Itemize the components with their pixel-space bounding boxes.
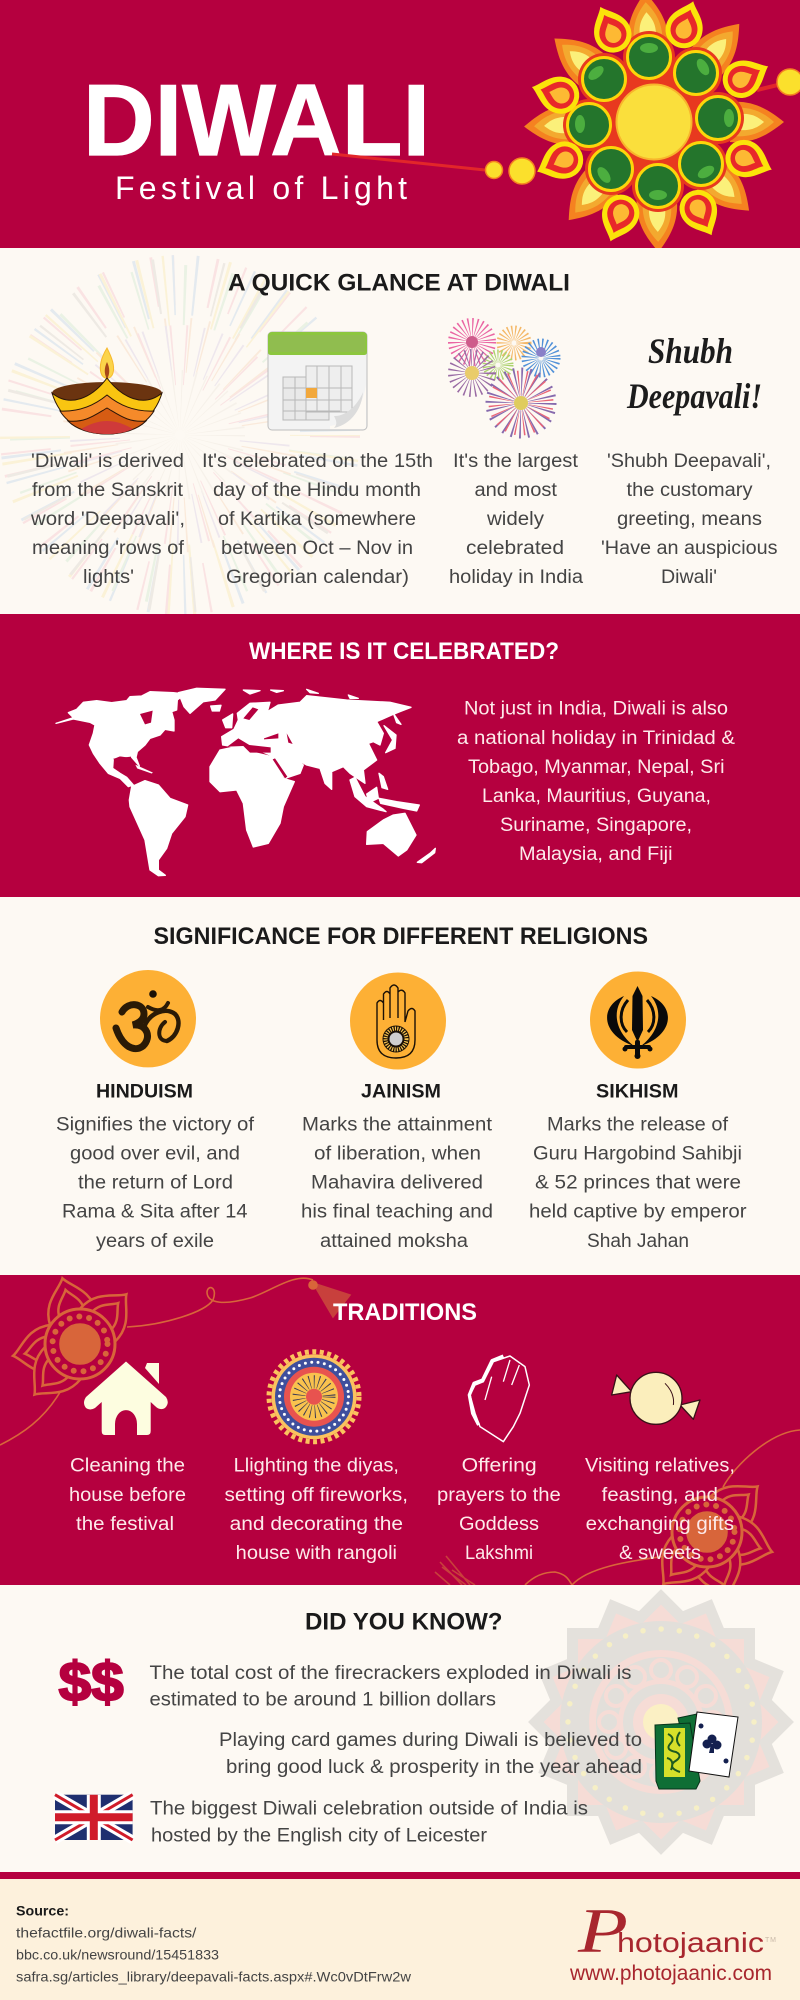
sources: bbc.co.uk/newsround/15451833 (16, 1946, 219, 1962)
text: largest holiday: celebrated (466, 538, 564, 559)
text: date: between Oct – Nov in (221, 538, 413, 559)
religion: Sikhism: & 52 princes that were (535, 1173, 741, 1194)
text: prayers: Lakshmi (465, 1543, 533, 1564)
text: largest holiday: and most (474, 480, 558, 501)
fact: firecrackers: The total cost of the firecrackers exploded in Diwali is (150, 1663, 632, 1684)
text: countries: Not just in India, Diwali is also (464, 699, 728, 720)
religion: Hinduism (56, 1081, 255, 1252)
logo: Photojaanic: P (577, 1895, 628, 1966)
sources: Source: (16, 1903, 69, 1919)
sources: safra.sg/articles_library/deepavali-facts.aspx#.Wc0vDtFrw2w (16, 1968, 412, 1984)
text: date (202, 451, 433, 588)
religion: Hinduism: years of exile (96, 1231, 214, 1252)
text: greeting meaning: greeting, means (617, 509, 762, 530)
heading: SIGNIFICANCE FOR DIFFERENT RELIGIONS (154, 923, 648, 950)
fact: Leicester: hosted by the English city of Leicester (151, 1826, 488, 1847)
text: cleaning (69, 1456, 186, 1535)
world map (56, 688, 435, 876)
religion: Sikhism: SIKHISM (596, 1081, 678, 1103)
panel: footer (0, 1879, 800, 2000)
fact: card games (219, 1730, 642, 1778)
text: lighting: setting off fireworks, (224, 1485, 408, 1506)
icon: dollar signs: $$ (59, 1650, 124, 1713)
divider band (0, 1872, 800, 1879)
religion: Jainism: of liberation, when (314, 1144, 481, 1165)
religion: Sikhism (529, 1081, 747, 1252)
religion: Sikhism: held captive by emperor (529, 1202, 747, 1223)
text: Deepavali origin: meaning 'rows of (32, 538, 185, 559)
text: date: Gregorian calendar) (226, 567, 409, 588)
panel: quick glance (0, 248, 800, 614)
text: greeting meaning (601, 451, 778, 588)
religion: Jainism: his final teaching and (301, 1202, 493, 1223)
religion: Jainism: Marks the attainment (302, 1114, 493, 1136)
text: visiting (585, 1456, 735, 1564)
icon: khanda (590, 972, 686, 1068)
text: Deepavali origin: word 'Deepavali', (30, 509, 185, 530)
religion: Jainism: attained moksha (320, 1231, 468, 1252)
icon: praying hand (469, 1356, 529, 1442)
text: lighting: house with rangoli (236, 1543, 397, 1564)
text: countries: a national holiday in Trinidad & (457, 728, 735, 749)
logo: Photojaanic: TM (765, 1937, 776, 1944)
religion: Sikhism: Guru Hargobind Sahibji (533, 1144, 742, 1165)
text: lighting: Llighting the diyas, (234, 1456, 399, 1477)
icon: playing cards (655, 1712, 738, 1789)
text: cleaning: house before (69, 1485, 186, 1506)
religion: Hinduism: Rama & Sita after 14 (62, 1202, 248, 1223)
religion: Jainism: Mahavira delivered (311, 1173, 483, 1194)
sources: thefactfile.org/diwali-facts/ (16, 1925, 197, 1941)
heading: A QUICK GLANCE AT DIWALI (228, 270, 570, 296)
fact: card games: Playing card games during Diwali is believed to (219, 1730, 642, 1751)
religion: Sikhism: Shah Jahan (587, 1231, 689, 1252)
decorative rakhi bottom right (434, 1429, 800, 1585)
icon: jain hand (350, 972, 446, 1070)
text: visiting: Visiting relatives, (585, 1456, 735, 1477)
text: visiting: & sweets (619, 1543, 701, 1564)
panel: did you know (0, 1585, 800, 1872)
religion: Jainism: JAINISM (361, 1081, 441, 1103)
greeting: Shubh Deepavali (626, 331, 762, 416)
religion: Sikhism: Marks the release of (547, 1114, 729, 1136)
panel: significance for religions (0, 897, 800, 1275)
heading: WHERE IS IT CELEBRATED? (249, 638, 559, 665)
text: date: day of the Hindu month (213, 480, 421, 501)
logo: Photojaanic (569, 1895, 776, 1985)
fact: firecrackers: estimated to be around 1 billion dollars (150, 1689, 496, 1710)
text: countries: Malaysia, and Fiji (519, 844, 672, 865)
text: countries: Tobago, Myanmar, Nepal, Sri (468, 757, 724, 778)
firework background burst (25, 280, 335, 590)
text: countries: Lanka, Mauritius, Guyana, (482, 786, 711, 807)
panel: header banner (0, 0, 800, 253)
icon: rangoli (269, 1352, 359, 1442)
decorative rakhi top left (0, 1272, 350, 1445)
religion: Hinduism: the return of Lord (78, 1173, 233, 1194)
text: greeting meaning: the customary (626, 480, 753, 501)
fact: firecrackers (150, 1663, 632, 1710)
heading: TRADITIONS (333, 1299, 477, 1326)
text: largest holiday: holiday in India (449, 567, 583, 588)
text: Deepavali origin (30, 451, 185, 588)
text: visiting: feasting, and (602, 1485, 718, 1506)
icon: house (84, 1362, 168, 1435)
heading: DID YOU KNOW? (305, 1608, 502, 1635)
panel: traditions (0, 1272, 800, 1604)
text: prayers (437, 1456, 561, 1564)
text: greeting meaning: Diwali' (661, 567, 717, 588)
text: prayers: prayers to the (437, 1485, 561, 1506)
panel: where is it celebrated (0, 614, 800, 897)
text: date: of Kartika (somewhere (218, 509, 416, 530)
fact: Leicester (150, 1799, 588, 1847)
text: Deepavali origin: from the Sanskrit (32, 480, 184, 501)
text: Deepavali origin: 'Diwali' is derived (31, 451, 184, 472)
icon: om (100, 970, 196, 1067)
text: countries: Suriname, Singapore, (500, 815, 692, 836)
fact: Leicester: The biggest Diwali celebration outside of India is (150, 1799, 588, 1820)
religion: Hinduism: good over evil, and (70, 1144, 240, 1165)
religion: Jainism (301, 1081, 493, 1252)
text: visiting: exchanging gifts (586, 1514, 734, 1535)
text: date: It's celebrated on the 15th (202, 451, 433, 472)
text: largest holiday: widely (486, 509, 545, 530)
decorative mandala (528, 1589, 794, 1855)
text: prayers: Offering (462, 1456, 537, 1477)
fact: card games: bring good luck & prosperity in the year ahead (226, 1757, 642, 1778)
sources (16, 1903, 412, 1984)
icon: calendar (268, 332, 367, 430)
icon: diya lamp (52, 348, 162, 434)
text: prayers: Goddess (459, 1514, 539, 1535)
logo: Photojaanic: www.photojaanic.com (569, 1962, 772, 1985)
text: greeting meaning: 'Shubh Deepavali', (607, 451, 771, 472)
text: countries (457, 699, 735, 865)
subtitle: Festival of Light (115, 170, 407, 206)
logo: Photojaanic: hotojaanic (617, 1927, 764, 1958)
greeting: Shubh Deepavali: Deepavali! (626, 376, 762, 416)
icon: candy (612, 1372, 700, 1424)
greeting: Shubh Deepavali: Shubh (648, 331, 733, 371)
religion: Hinduism: HINDUISM (96, 1081, 193, 1103)
text: greeting meaning: 'Have an auspicious (601, 538, 778, 559)
text: lighting (224, 1456, 408, 1564)
text: lighting: and decorating the (230, 1514, 403, 1535)
icon: rakhi flower with beads (332, 0, 800, 253)
icon: fireworks (458, 328, 552, 424)
religion: Hinduism: Signifies the victory of (56, 1114, 255, 1136)
text: Deepavali origin: lights' (83, 567, 134, 588)
text: cleaning: Cleaning the (70, 1456, 185, 1477)
title: DIWALI (83, 65, 430, 177)
text: cleaning: the festival (76, 1514, 174, 1535)
text: largest holiday: It's the largest (453, 451, 579, 472)
text: largest holiday (449, 451, 583, 588)
icon: UK flag (55, 1795, 133, 1840)
